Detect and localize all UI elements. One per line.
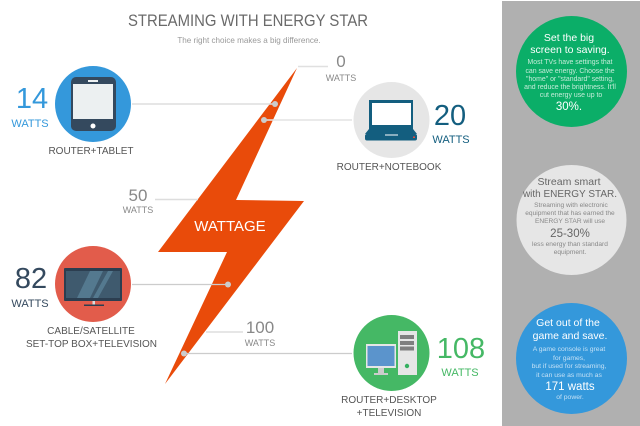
device: television [11,246,157,350]
scale: 0 watts [298,52,356,83]
tip: game console: for games, [553,355,585,362]
label [341,395,437,419]
label: +TELEVISION [357,408,421,419]
value: 20 watts: 20 [434,100,466,132]
tip: big screen: Set the big [544,32,594,44]
scale: 50 watts: 50 [129,186,147,205]
tip: stream smart: ENERGY STAR will use [535,218,605,225]
tip: big screen: screen to saving. [530,44,610,56]
tip: stream smart: Streaming with electronic [534,202,609,209]
scale: 100 watts [206,318,275,348]
tip: game console: A game console is great [533,346,605,353]
value: 82 watts: 82 [15,263,47,295]
connector: television [132,282,231,288]
tip: big screen: and reduce the brightness. It'll [524,84,616,91]
connector: tablet [132,101,278,107]
label: SET-TOP BOX+TELEVISION [26,339,157,350]
value: 108 watts [437,333,485,379]
tip: game console [516,303,627,414]
tip: game console: of power. [556,394,584,401]
scale: 100 watts: 100 [246,318,274,337]
tip: stream smart: less energy than standard [532,241,608,248]
tip: game console: 171 watts [545,381,595,393]
device: notebook [337,82,470,173]
value: 20 watts [432,100,470,146]
label: ROUTER+TABLET [48,146,134,157]
icon: desktop computer [354,315,430,391]
tip: big screen: 30%. [556,101,582,113]
tip: stream smart: with ENERGY STAR. [522,189,617,200]
label [26,326,157,350]
value: 108 watts: WATTS [441,367,479,379]
scale: 0 watts: WATTS [326,73,356,83]
scale: 100 watts: WATTS [245,338,275,348]
tip: stream smart: 25-30% [550,228,590,240]
tip: game console: but if used for streaming, [532,363,607,370]
scale: 50 watts [123,186,198,215]
label: ROUTER+NOTEBOOK [337,162,442,173]
connector: desktop [181,350,352,356]
title: STREAMING WITH ENERGY STAR [128,12,368,30]
connector: notebook [261,117,352,123]
label: CABLE/SATELLITE [47,326,135,337]
icon: television [55,246,131,322]
subtitle: The right choice makes a big difference. [177,36,321,45]
value: 14 watts: WATTS [11,118,49,130]
tip: big screen: Most TVs have settings that [528,59,613,66]
icon: tablet [55,66,131,142]
icon: laptop [354,82,430,158]
tip: stream smart: equipment. [554,249,586,256]
value: 82 watts [11,263,49,310]
device: tablet [11,66,134,157]
tip: big screen [516,16,627,127]
value: 82 watts: WATTS [11,298,49,310]
tip: stream smart: Stream smart [537,176,601,188]
tip: game console: Get out of the [536,317,600,329]
tip: game console: it can use as much as [536,372,602,379]
lightning bolt [158,68,304,384]
value: 108 watts: 108 [437,333,485,365]
sidebar panel [502,1,640,426]
value: 20 watts: WATTS [432,134,470,146]
bolt label: WATTAGE [194,218,266,235]
tip: stream smart: equipment that has earned the [525,210,615,217]
value: 14 watts: 14 [16,83,48,115]
device: desktop [341,315,485,419]
tip: game console: game and save. [533,330,607,342]
tip: big screen: can save energy. Choose the [525,68,615,75]
label: ROUTER+DESKTOP [341,395,437,406]
tip: big screen: cut energy use up to [540,92,602,99]
scale: 0 watts: 0 [336,52,346,71]
tip: big screen: "home" or "standard" setting, [526,76,614,83]
tip: stream smart [516,165,626,275]
scale: 50 watts: WATTS [123,205,153,215]
value: 14 watts [11,83,49,130]
